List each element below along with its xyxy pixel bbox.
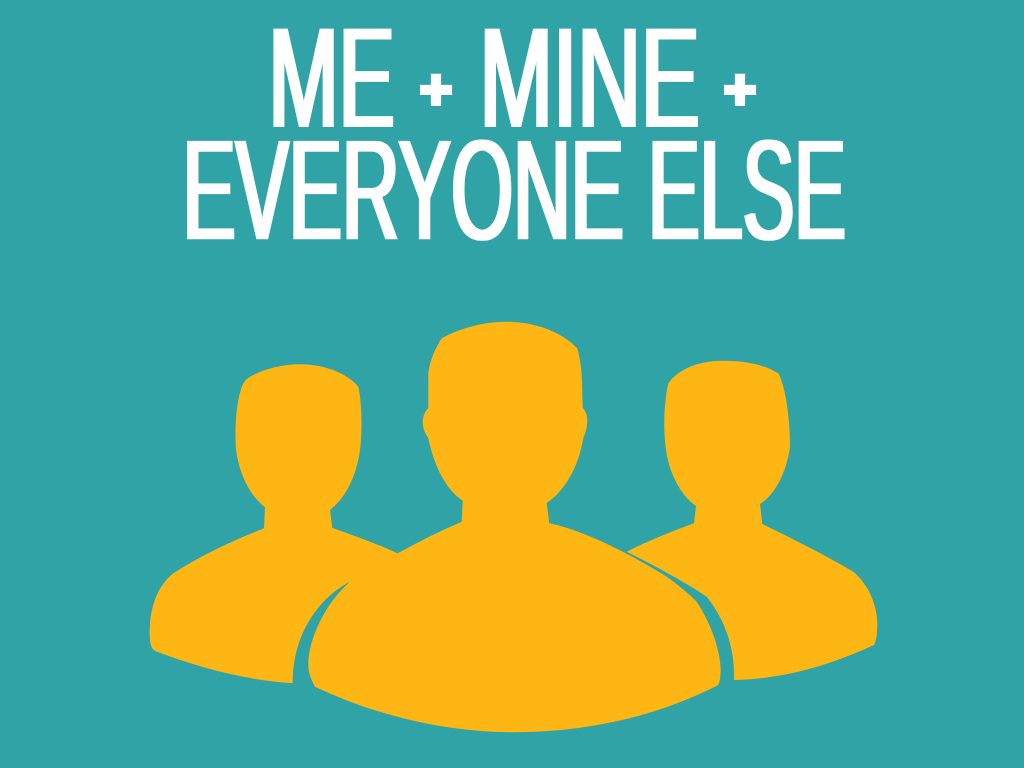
title line 2: ELSE	[648, 111, 846, 270]
icon: group of three people	[150, 322, 877, 732]
title line 1: ME	[268, 0, 395, 158]
title line 1: +	[420, 58, 452, 120]
icon: right person	[627, 361, 877, 680]
title line 1	[268, 0, 756, 158]
title line 1: MINE	[480, 0, 700, 158]
title line 1: +	[724, 58, 756, 120]
title line 2: EVERYONE	[182, 111, 624, 270]
icon: centre person	[308, 322, 721, 732]
title	[182, 0, 846, 270]
icon: left person	[150, 364, 400, 683]
